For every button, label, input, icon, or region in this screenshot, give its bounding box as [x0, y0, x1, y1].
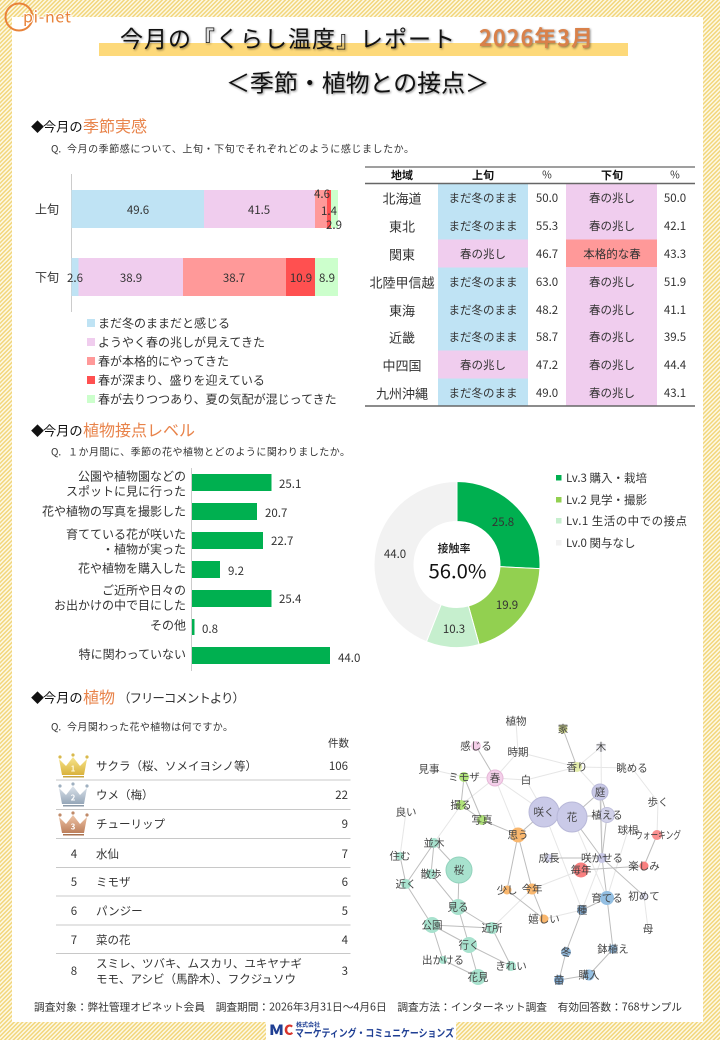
- regional table: 春の兆し: [589, 274, 635, 290]
- ranking table: 6: [342, 874, 348, 890]
- stacked bar chart: 上旬: [35, 200, 59, 218]
- question: 関わり方: Q.: [51, 444, 61, 458]
- horizontal bar chart: 9.2: [228, 563, 244, 579]
- stacked bar chart: 下旬: [35, 268, 59, 286]
- title: 2026年3月: [479, 21, 593, 53]
- icon: gold crown: 1: [71, 764, 76, 774]
- stacked bar chart: 4.6: [314, 186, 330, 202]
- network word labels: 木: [596, 740, 607, 754]
- network word labels: 良い: [396, 804, 416, 820]
- network word labels: 写真: [472, 812, 492, 828]
- network word labels: 咲かせる: [581, 850, 623, 866]
- legend: stacked bar: 春が深まり、盛りを迎えている: [98, 372, 265, 388]
- network word labels: 楽しみ: [628, 858, 660, 874]
- ranking table: 5: [71, 874, 77, 890]
- regional table: 関東: [389, 244, 415, 264]
- horizontal bar chart: 44.0: [338, 650, 360, 666]
- legend: stacked bar: ようやく春の兆しが見えてきた: [98, 334, 265, 350]
- network word labels: 眺める: [616, 760, 648, 776]
- regional table: 63.0: [536, 274, 558, 290]
- network word labels: 歩く: [648, 794, 668, 810]
- regional table: 上旬: [472, 167, 494, 183]
- network word labels: [390, 714, 681, 988]
- question: 植物: 今月関わった花や植物は何ですか。: [67, 718, 233, 734]
- network word labels: 春: [490, 770, 501, 786]
- heading: 植物: 今月の: [43, 688, 83, 706]
- horizontal bar chart: [42, 468, 360, 671]
- heading: 植物接点レベル: 今月の: [43, 420, 83, 440]
- network nodes: [396, 724, 662, 985]
- network strong edges: [400, 729, 657, 980]
- regional table: 39.5: [664, 329, 686, 345]
- regional table: まだ冬のまま: [448, 274, 518, 290]
- network word labels: 初めて: [628, 888, 660, 904]
- network word labels: 育てる: [591, 890, 623, 906]
- network word labels: ミモザ: [448, 770, 480, 784]
- heading: 植物: [31, 684, 245, 708]
- regional table: 北陸甲信越: [369, 272, 435, 292]
- donut chart: 44.0: [384, 546, 406, 562]
- ranking table: パンジー: [96, 903, 143, 919]
- network word labels: 購入: [578, 968, 600, 982]
- regional table: 51.9: [664, 274, 686, 290]
- ranking table: 4: [342, 932, 349, 948]
- ranking table: 菜の花: [96, 932, 131, 948]
- network word labels: 成長: [538, 850, 560, 866]
- stacked bar chart: 2.9: [326, 217, 342, 233]
- subtitle: ＜季節・植物との接点＞: [226, 64, 489, 98]
- horizontal bar chart: ご近所や日々の: [102, 582, 186, 598]
- ranking table: 6: [71, 903, 77, 919]
- network word labels: 思う: [508, 828, 528, 842]
- company logo: [266, 1020, 456, 1040]
- regional table: 本格的な春: [583, 246, 641, 262]
- network word labels: きれい: [495, 958, 527, 974]
- regional table: まだ冬のまま: [448, 329, 518, 345]
- regional table: 42.1: [664, 218, 686, 234]
- regional table: 49.0: [536, 385, 558, 401]
- network word labels: 見事: [418, 762, 440, 776]
- regional table: 春の兆し: [589, 385, 635, 401]
- ranking table: 106: [329, 758, 348, 774]
- network word labels: 植える: [591, 808, 623, 822]
- regional table: 近畿: [389, 328, 415, 346]
- regional table: 東北: [389, 216, 415, 236]
- donut chart: 25.8: [492, 514, 514, 530]
- heading: 植物接点レベル: 植物接点レベル: [83, 417, 195, 441]
- pi-net logo: pi-net: [23, 4, 72, 28]
- question: 関わり方: １か月間に、季節の花や植物とどのように関わりましたか。: [68, 444, 350, 458]
- regional table: 北海道: [382, 188, 422, 208]
- legend: donut: Lv.0 関与なし: [566, 535, 636, 551]
- regional table: まだ冬のまま: [448, 302, 518, 318]
- regional table: [365, 167, 695, 406]
- company logo: M: [269, 1020, 284, 1040]
- network word labels: 桜: [454, 862, 465, 878]
- network word labels: 少し: [496, 882, 518, 898]
- network word labels: 公園: [422, 918, 442, 932]
- heading: 植物: 植物: [83, 684, 115, 708]
- network word labels: 散歩: [420, 866, 442, 882]
- legend: donut: Lv.2 見学・撮影: [566, 492, 647, 508]
- network word labels: 庭: [595, 784, 606, 800]
- company logo: 株式会社: [296, 1020, 320, 1029]
- horizontal bar chart: 花や植物の写真を撮影した: [42, 502, 186, 520]
- heading: 季節実感: 季節実感: [83, 113, 147, 137]
- ranking table: スミレ、ツバキ、ムスカリ、ユキヤナギ: [96, 956, 302, 972]
- question: 季節感: 今月の季節感について、上旬・下旬でそれぞれどのように感じましたか。: [67, 140, 414, 156]
- stacked bar chart: 38.9: [120, 270, 142, 286]
- network word labels: 母: [643, 922, 654, 936]
- legend: stacked bar: 春が本格的にやってきた: [98, 352, 229, 370]
- network word labels: 花: [567, 810, 578, 824]
- regional table: 春の兆し: [589, 190, 635, 206]
- horizontal bar chart: 20.7: [265, 505, 287, 521]
- network word labels: 今年: [522, 882, 542, 896]
- stacked bar chart: 1.4: [321, 203, 338, 219]
- network word labels: 花見: [468, 970, 489, 984]
- heading: 季節実感: [31, 113, 147, 137]
- heading: 植物: ◆: [31, 688, 44, 706]
- network word labels: 見る: [448, 900, 468, 914]
- network word labels: ウォーキング: [635, 828, 681, 842]
- horizontal bar chart: 特に関わっていない: [79, 646, 186, 662]
- ranking table: 7: [342, 846, 348, 862]
- network word labels: 出かける: [422, 952, 464, 968]
- company logo: C: [284, 1020, 294, 1040]
- network word labels: 冬: [561, 944, 572, 960]
- regional table: 47.2: [536, 357, 558, 373]
- legend: donut: Lv.1 生活の中での接点: [566, 513, 687, 529]
- regional table: 九州沖縄: [376, 384, 428, 402]
- icon: bronze crown: [58, 811, 89, 836]
- ranking table: 水仙: [96, 846, 119, 862]
- stacked bar chart: 10.9: [290, 270, 312, 286]
- ranking table: 4: [71, 846, 78, 862]
- pi-net logo: [6, 4, 72, 30]
- regional table: 44.4: [664, 357, 687, 373]
- regional table: 春の兆し: [460, 246, 506, 262]
- stacked bar chart: [35, 174, 342, 312]
- icon: bronze crown: 3: [71, 822, 76, 832]
- horizontal bar chart: 育てている花が咲いた: [66, 526, 186, 542]
- regional table: 春の兆し: [460, 357, 506, 373]
- regional table: まだ冬のまま: [448, 218, 518, 234]
- ranking table: 8: [71, 963, 77, 979]
- co-occurrence network: [390, 714, 681, 988]
- donut chart: [374, 482, 540, 647]
- heading: 季節実感: ◆: [31, 116, 44, 136]
- ranking table: 22: [335, 787, 348, 803]
- legend: stacked bar: 春が去りつつあり、夏の気配が混じってきた: [98, 390, 337, 408]
- network word labels: 感じる: [460, 738, 492, 754]
- regional table: 48.2: [536, 302, 558, 318]
- regional table: 中四国: [382, 356, 422, 374]
- regional table: 55.3: [536, 218, 558, 234]
- survey footer note: 調査対象：弊社管理オピネット会員 調査期間：2026年3月31日～4月6日 調査方法：インターネット調査 有効回答数：768サンプル: [34, 1000, 682, 1014]
- network word labels: 近く: [396, 876, 416, 892]
- network faint edges: [400, 721, 658, 929]
- regional table: 東海: [389, 300, 415, 320]
- network word labels: 撮る: [450, 798, 472, 812]
- network word labels: 種: [577, 902, 588, 918]
- heading: 植物接点レベル: ◆: [31, 420, 44, 440]
- network word labels: 咲く: [534, 804, 554, 820]
- regional table: %: [542, 168, 552, 182]
- network word labels: 苗: [554, 972, 564, 988]
- regional table: 58.7: [536, 329, 558, 345]
- legend: donut: [556, 470, 687, 551]
- icon: silver crown: 2: [71, 792, 76, 804]
- ranking table: サクラ（桜、ソメイヨシノ等）: [96, 758, 257, 774]
- ranking table: 3: [342, 963, 348, 979]
- question: 植物: Q.: [51, 718, 61, 734]
- question: 季節感: Q.: [51, 140, 61, 156]
- donut chart: 接触率: [438, 540, 470, 556]
- network word labels: 白: [521, 772, 531, 788]
- regional table: 春の兆し: [589, 329, 635, 345]
- title: 今月の『くらし温度』レポート: [120, 20, 455, 54]
- regional table: まだ冬のまま: [448, 190, 518, 206]
- horizontal bar chart: スポットに見に行った: [66, 482, 186, 500]
- ranking table: モモ、アシビ（馬酔木）、フクジュソウ: [96, 971, 296, 987]
- heading: 植物: （フリーコメントより）: [118, 688, 245, 706]
- horizontal bar chart: 22.7: [271, 533, 293, 549]
- horizontal bar chart: ・植物が実った: [102, 540, 186, 558]
- stacked bar chart: 41.5: [248, 202, 270, 218]
- network word labels: 毎年: [570, 862, 592, 878]
- icon: gold crown: [58, 753, 89, 778]
- network word labels: 鉢植え: [597, 942, 629, 956]
- regional table: %: [670, 168, 680, 182]
- donut chart: 10.3: [443, 621, 465, 637]
- regional table: 地域: [391, 167, 413, 183]
- ranking table: [56, 736, 350, 987]
- horizontal bar chart: 公園や植物園などの: [78, 468, 186, 484]
- network word labels: 球根: [618, 822, 639, 838]
- ranking table: チューリップ: [96, 816, 165, 832]
- regional table: 春の兆し: [589, 357, 635, 373]
- heading: 季節実感: 今月の: [43, 116, 83, 136]
- ranking table: 5: [342, 903, 348, 919]
- legend: stacked bar: まだ冬のままだと感じる: [98, 314, 230, 332]
- regional table: 41.1: [664, 302, 686, 318]
- horizontal bar chart: 0.8: [202, 621, 218, 637]
- network word labels: 行く: [458, 938, 480, 952]
- network word labels: 香り: [566, 760, 588, 774]
- regional table: 43.3: [664, 246, 686, 262]
- network word labels: 住む: [390, 848, 410, 864]
- regional table: 下旬: [601, 167, 623, 183]
- regional table: 春の兆し: [589, 302, 635, 318]
- icon: silver crown: [58, 782, 89, 806]
- ranking table: 7: [71, 932, 77, 948]
- regional table: まだ冬のまま: [448, 385, 518, 401]
- ranking table: 件数: [328, 736, 349, 750]
- network word labels: 並木: [424, 836, 445, 850]
- regional table: 46.7: [536, 246, 558, 262]
- regional table: 50.0: [664, 190, 686, 206]
- network word labels: 近所: [482, 920, 503, 936]
- horizontal bar chart: 25.1: [279, 476, 301, 492]
- regional table: 43.1: [664, 385, 686, 401]
- title: [99, 20, 628, 56]
- horizontal bar chart: その他: [150, 616, 186, 634]
- donut chart: 56.0%: [428, 556, 487, 584]
- stacked bar chart: 8.9: [319, 270, 335, 286]
- network word labels: 嬉しい: [528, 912, 560, 926]
- donut chart: 19.9: [496, 597, 518, 613]
- horizontal bar chart: お出かけの中で目にした: [54, 596, 186, 614]
- horizontal bar chart: 花や植物を購入した: [78, 560, 186, 576]
- ranking table: ウメ（梅）: [96, 787, 154, 803]
- horizontal bar chart: 25.4: [279, 591, 302, 607]
- network word labels: 家: [558, 722, 569, 736]
- legend: stacked bar: [87, 314, 337, 408]
- ranking table: 9: [342, 816, 348, 832]
- legend: donut: Lv.3 購入・栽培: [566, 470, 647, 486]
- heading: 植物接点レベル: [31, 417, 195, 441]
- ranking table: ミモザ: [96, 874, 130, 890]
- stacked bar chart: 49.6: [127, 202, 149, 218]
- network word labels: 植物: [506, 714, 526, 728]
- network word labels: 時期: [508, 744, 528, 760]
- regional table: 50.0: [536, 190, 558, 206]
- regional table: 春の兆し: [589, 218, 635, 234]
- stacked bar chart: 2.6: [67, 270, 83, 286]
- stacked bar chart: 38.7: [223, 270, 245, 286]
